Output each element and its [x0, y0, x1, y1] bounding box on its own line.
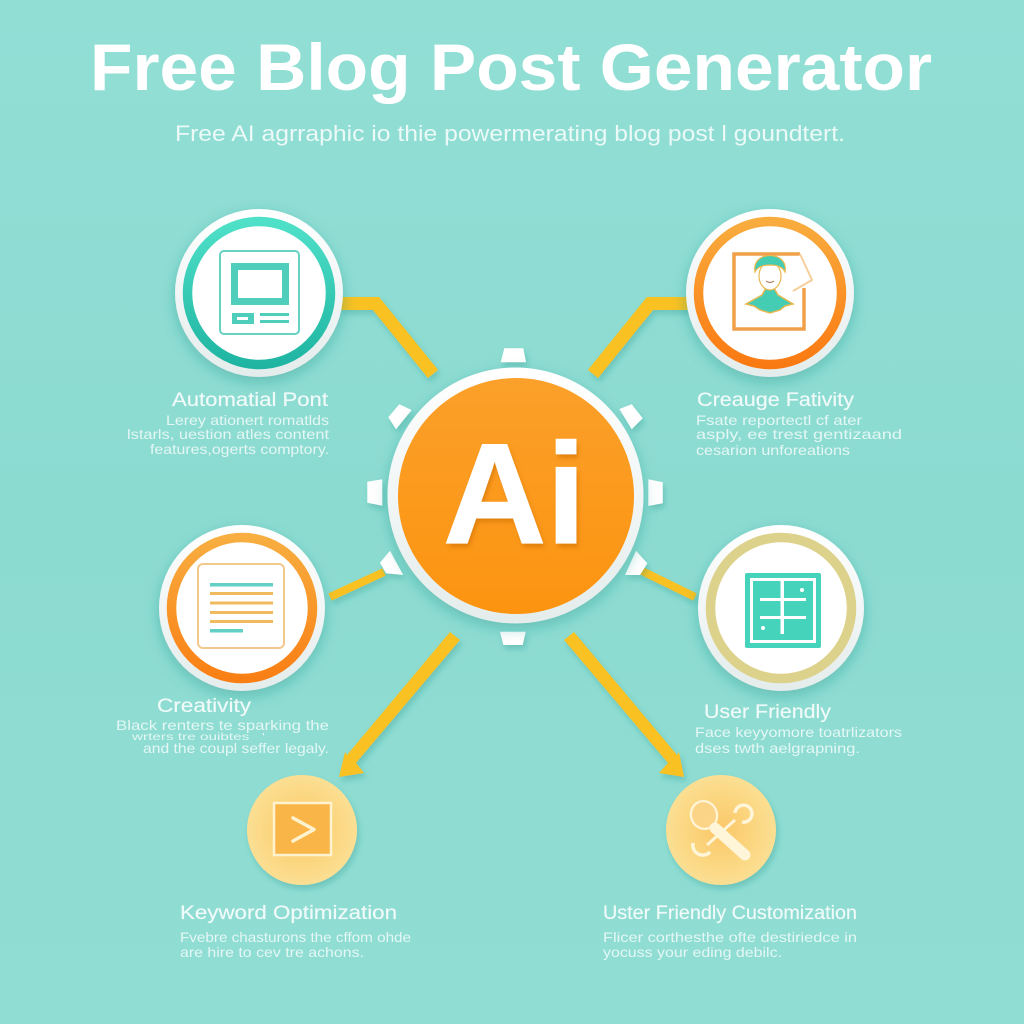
description: Fsate reportectl cf ater: [696, 412, 862, 428]
icon: portrait card: [734, 254, 812, 329]
description: Lerey ationert romatlds: [166, 412, 329, 428]
heading: Creauge Fativity: [697, 390, 855, 411]
hub spokes: [367, 348, 663, 645]
description: are hire to cev tre achons.: [180, 944, 364, 960]
panel: keyword optimization: [180, 775, 411, 960]
hub white rim: [388, 368, 644, 624]
icon badge: [247, 775, 357, 885]
icon: screen layout: [220, 251, 299, 334]
heading: Uster Friendly Customization: [603, 903, 857, 924]
circle badge: [686, 209, 854, 377]
connector: top left: [340, 304, 433, 374]
icon badge: [666, 775, 776, 885]
central AI hub: [367, 348, 663, 645]
Ai label: Ai: [443, 415, 586, 574]
title: Free Blog Post Generator: [90, 30, 932, 104]
panel: creauge fativity: [686, 209, 902, 458]
heading: Creativity: [157, 696, 252, 717]
panel: creativity: [116, 525, 329, 756]
heading: Automatial Pont: [172, 390, 329, 411]
hub orange disc: [398, 378, 634, 614]
connector: top right: [593, 304, 690, 374]
icon: grid table: [745, 573, 821, 648]
description: [603, 929, 857, 960]
arrow: to user friendly customization: [564, 632, 684, 777]
description: Black renters te sparking the: [116, 717, 329, 733]
description: lstarls, uestion atles content: [127, 426, 329, 442]
circle badge: [698, 525, 864, 691]
description: Face keyyomore toatrlizators: [695, 724, 902, 740]
description: dses twth aelgrapning.: [695, 740, 860, 756]
description: cesarion unforeations: [696, 442, 850, 458]
description: Flicer corthesthe ofte destiriedce in: [603, 929, 857, 945]
description: [127, 412, 329, 457]
icon: text document: [198, 564, 284, 648]
Ai label: Ai: [445, 419, 588, 578]
description: Fvebre chasturons the cffom ohde: [180, 929, 411, 945]
panel: automatial post: [127, 209, 343, 457]
description: [696, 412, 902, 458]
connector: middle left: [330, 572, 384, 597]
description: features,ogerts comptory.: [150, 441, 329, 457]
description: and the coupl seffer legaly.: [143, 740, 329, 756]
panel: user friendly customization: [603, 775, 857, 960]
heading: User Friendly: [704, 702, 832, 723]
description: yocuss your eding debilc.: [603, 944, 782, 960]
description: wrters tre ouibtes ': [130, 732, 265, 743]
connector: middle right: [642, 571, 695, 597]
arrow: to keyword optimization: [339, 632, 460, 777]
description: [180, 929, 411, 960]
circle badge: [159, 525, 325, 691]
description: asply, ee trest gentizaand: [696, 426, 902, 442]
circle badge: [175, 209, 343, 377]
heading: Keyword Optimization: [180, 903, 397, 924]
panel: user friendly: [695, 525, 902, 756]
subtitle: Free AI agrraphic io thie powermerating blog post l goundtert.: [175, 121, 845, 146]
description: [116, 717, 329, 756]
description: [695, 724, 902, 756]
